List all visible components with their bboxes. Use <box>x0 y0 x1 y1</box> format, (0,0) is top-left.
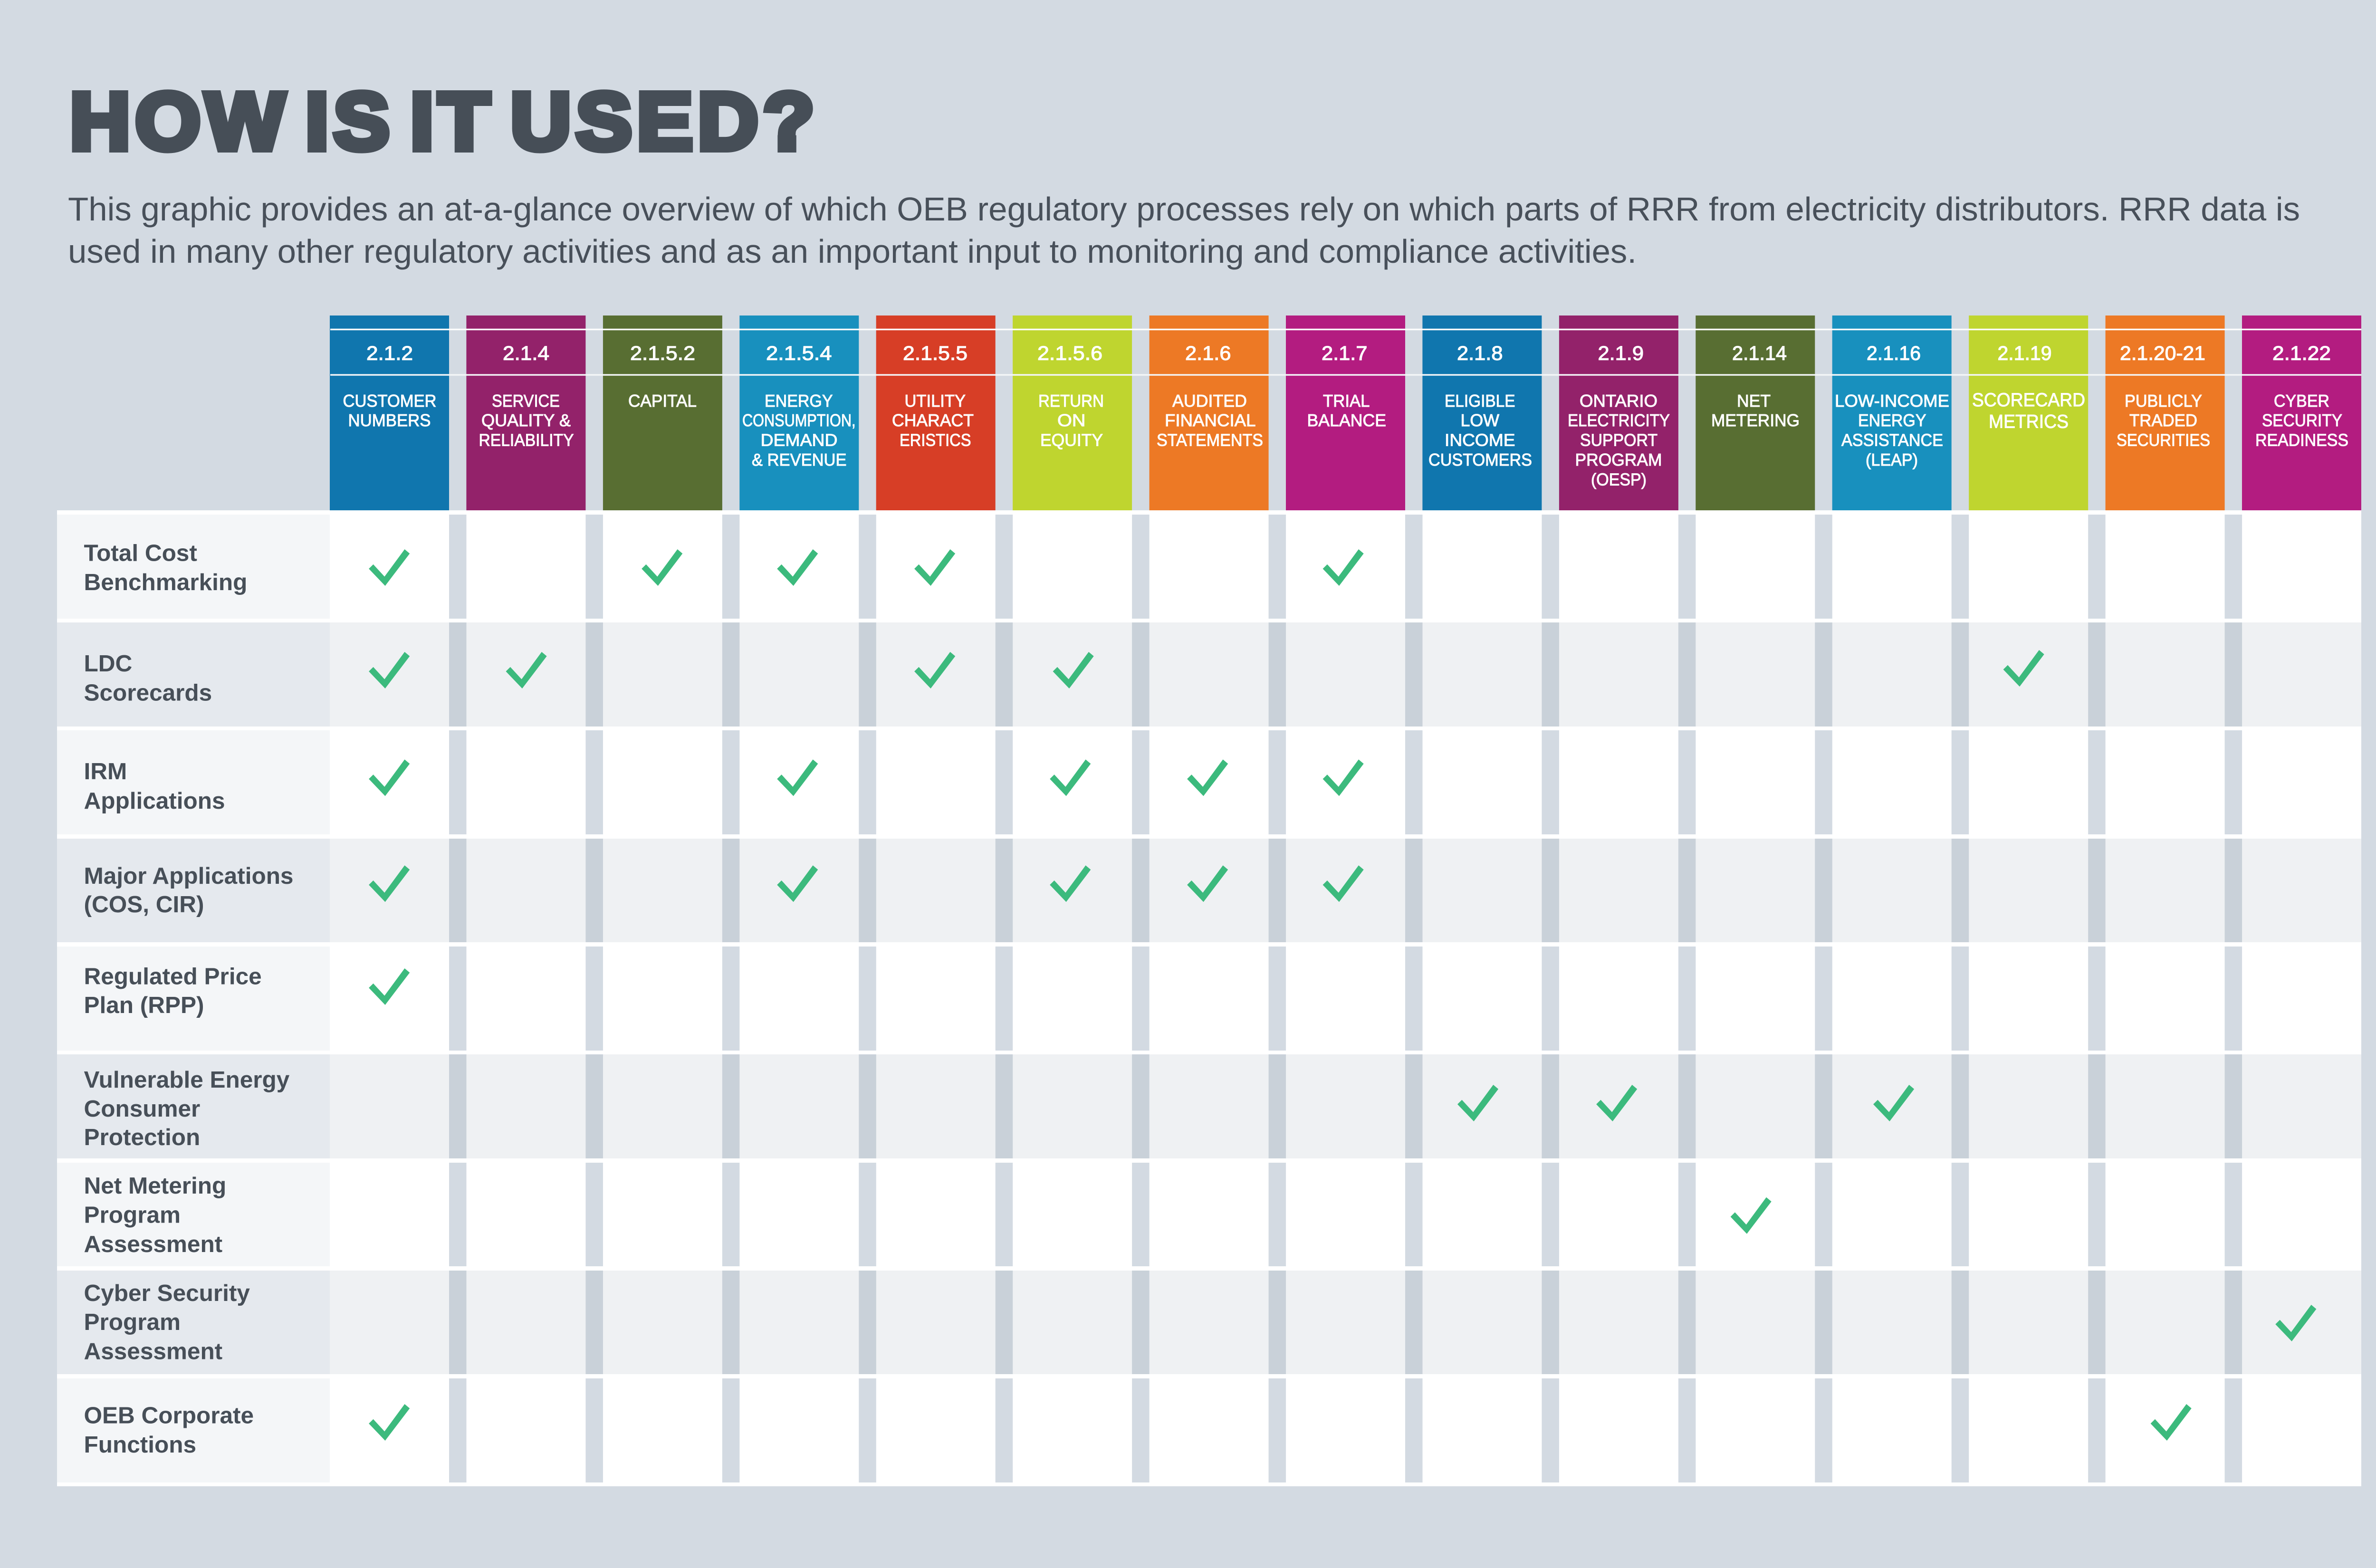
section name: UTILITY <box>905 391 966 411</box>
column header: 2.1.20-21 Publicly Traded Securities <box>2106 316 2225 510</box>
section name <box>1835 391 1949 469</box>
section name <box>892 391 974 449</box>
section name: ON <box>1057 411 1085 430</box>
column header: 2.1.5.4 Energy Consumption, Demand and Revenue <box>739 316 859 510</box>
row label: Program <box>84 1309 181 1335</box>
row: IRM Applications <box>57 730 2242 834</box>
section number: 2.1.20-21 <box>2120 342 2205 364</box>
section name <box>2255 391 2348 449</box>
section name: RELIABILITY <box>479 430 574 449</box>
section name: SERVICE <box>492 391 560 411</box>
row label: Net Metering <box>84 1173 226 1199</box>
section name: PUBLICLY <box>2125 391 2202 411</box>
section name: READINESS <box>2255 430 2348 449</box>
section name: ENERGY <box>765 391 833 411</box>
section name <box>1568 391 1670 489</box>
check marks <box>369 650 2044 688</box>
column header: 2.1.5.5 Utility Characteristics <box>876 316 996 510</box>
section name <box>1038 391 1104 449</box>
row: Cyber Security Program Assessment <box>57 1271 2361 1374</box>
section number: 2.1.5.4 <box>766 342 832 364</box>
section name: PROGRAM <box>1575 450 1662 469</box>
row label: Benchmarking <box>84 569 247 595</box>
intro text block: This graphic provides an at-a-glance overview of which OEB regulatory processes rely on which parts of RRR from electricity distributors. RRR data is <box>68 191 2300 228</box>
section name: SUPPORT <box>1580 430 1657 449</box>
section number: 2.1.16 <box>1867 342 1921 364</box>
row label: IRM <box>84 758 127 784</box>
row label: Total Cost <box>84 540 197 566</box>
row label: Program <box>84 1202 181 1228</box>
row label: Assessment <box>84 1231 222 1257</box>
section number: 2.1.8 <box>1457 342 1503 364</box>
section name: CHARACT <box>892 411 974 430</box>
column header: 2.1.19 Scorecard Metrics <box>1969 316 2088 510</box>
section name: CYBER <box>2274 391 2329 411</box>
section name <box>1157 391 1263 449</box>
section name: AUDITED <box>1172 391 1247 411</box>
check mark <box>369 968 410 1005</box>
section number: 2.1.7 <box>1322 342 1368 364</box>
section name: (LEAP) <box>1866 450 1918 469</box>
title: HOW IS IT USED? <box>70 76 819 167</box>
section number: 2.1.5.6 <box>1037 342 1102 364</box>
column header: 2.1.9 Ontario Electricity Support Program <box>1559 316 1678 510</box>
intro text block <box>68 191 2300 270</box>
section name: RETURN <box>1038 391 1104 411</box>
section name: BALANCE <box>1307 411 1386 430</box>
intro text block: used in many other regulatory activities and as an important input to monitoring and compliance activities. <box>68 233 1637 270</box>
section number: 2.1.19 <box>1998 342 2052 364</box>
section name: ELIGIBLE <box>1445 391 1515 411</box>
column header: 2.1.5.2 Capital <box>603 316 722 510</box>
section number: 2.1.2 <box>366 342 413 364</box>
section number: 2.1.4 <box>503 342 549 364</box>
check mark <box>1731 1197 1772 1234</box>
check mark <box>2275 1305 2316 1341</box>
section name: CONSUMPTION, <box>742 411 855 430</box>
section name: ERISTICS <box>900 430 971 449</box>
section name: (OESP) <box>1591 470 1647 489</box>
section number: 2.1.22 <box>2272 342 2331 364</box>
column header: 2.1.5.6 Return on Equity <box>1013 316 1132 510</box>
row label: OEB Corporate <box>84 1403 254 1428</box>
section name: ELECTRICITY <box>1568 411 1670 430</box>
row: OEB Corporate Functions <box>57 1378 2242 1482</box>
section name: CAPITAL <box>628 391 697 411</box>
section name <box>343 391 436 430</box>
row label: Regulated Price <box>84 964 262 989</box>
check marks <box>369 865 1364 902</box>
section name <box>1711 391 1800 430</box>
section name: METRICS <box>1989 411 2069 432</box>
section name <box>1972 390 2085 432</box>
section name: CUSTOMER <box>343 391 436 411</box>
check marks <box>1457 1085 1914 1121</box>
section name: & REVENUE <box>752 450 847 469</box>
row label: Protection <box>84 1124 200 1150</box>
section name: TRADED <box>2129 411 2197 430</box>
section name: INCOME <box>1445 430 1515 449</box>
check marks <box>369 1404 2192 1441</box>
row: LDC Scorecards <box>57 622 2361 727</box>
row: Major Applications <box>57 839 2361 942</box>
section name: ENERGY <box>1858 411 1926 430</box>
column header: 2.1.2 Customer Numbers <box>330 316 449 510</box>
column header: 2.1.4 Service Quality and Reliability <box>466 316 585 510</box>
section name: DEMAND <box>760 430 837 449</box>
row: Vulnerable Energy Consumer Protection <box>57 1054 2361 1158</box>
column header: 2.1.16 Low-Income Energy Assistance <box>1832 316 1952 510</box>
section number: 2.1.6 <box>1185 342 1231 364</box>
column header: 2.1.8 Eligible Low Income Customers <box>1422 316 1542 510</box>
section name: NET <box>1737 391 1771 411</box>
section name: SECURITY <box>2262 411 2342 430</box>
section number: 2.1.14 <box>1732 342 1787 364</box>
section name: ASSISTANCE <box>1841 430 1943 449</box>
section number: 2.1.9 <box>1598 342 1644 364</box>
section name <box>1307 391 1386 430</box>
column header: 2.1.22 Cyber Security Readiness <box>2242 316 2361 510</box>
panel: matrix table <box>57 510 2361 1486</box>
row label: (COS, CIR) <box>84 891 204 918</box>
row label: Functions <box>84 1432 196 1458</box>
section name: STATEMENTS <box>1157 430 1263 449</box>
section name <box>742 391 855 469</box>
row label: LDC <box>84 650 132 677</box>
section name: TRIAL <box>1323 391 1370 411</box>
row: Regulated Price Plan <box>57 947 2242 1051</box>
section name: LOW-INCOME <box>1835 391 1949 411</box>
section name: NUMBERS <box>348 411 431 430</box>
section name <box>479 391 574 449</box>
section name: QUALITY & <box>481 411 571 430</box>
row label: Cyber Security <box>84 1280 250 1306</box>
column header: 2.1.6 Audited Financial Statements <box>1150 316 1269 510</box>
row label: Vulnerable Energy <box>84 1067 290 1093</box>
row label: Assessment <box>84 1338 222 1365</box>
section name: FINANCIAL <box>1165 411 1255 430</box>
section number: 2.1.5.5 <box>903 342 968 364</box>
section name <box>2117 391 2210 449</box>
section number: 2.1.5.2 <box>630 342 695 364</box>
section name: EQUITY <box>1040 430 1103 449</box>
section name: LOW <box>1461 411 1500 430</box>
row: Net Metering Program Assessment <box>57 1163 2242 1266</box>
row label: Applications <box>84 788 225 814</box>
section name <box>1428 391 1532 469</box>
column header: 2.1.7 Trial Balance <box>1286 316 1405 510</box>
row label: Consumer <box>84 1096 200 1122</box>
section name: SECURITIES <box>2117 430 2210 449</box>
check marks <box>369 759 1364 796</box>
row label: Major Applications <box>84 863 293 889</box>
row: Total Cost Benchmarking <box>57 515 2242 619</box>
section name: CUSTOMERS <box>1428 450 1532 469</box>
section name: METERING <box>1711 411 1800 430</box>
row label: Scorecards <box>84 679 212 706</box>
column header: 2.1.14 Net Metering <box>1696 316 1815 510</box>
check marks <box>369 549 1364 586</box>
section name: SCORECARD <box>1972 390 2085 411</box>
section name: ONTARIO <box>1580 391 1657 411</box>
row label: Plan (RPP) <box>84 992 204 1018</box>
